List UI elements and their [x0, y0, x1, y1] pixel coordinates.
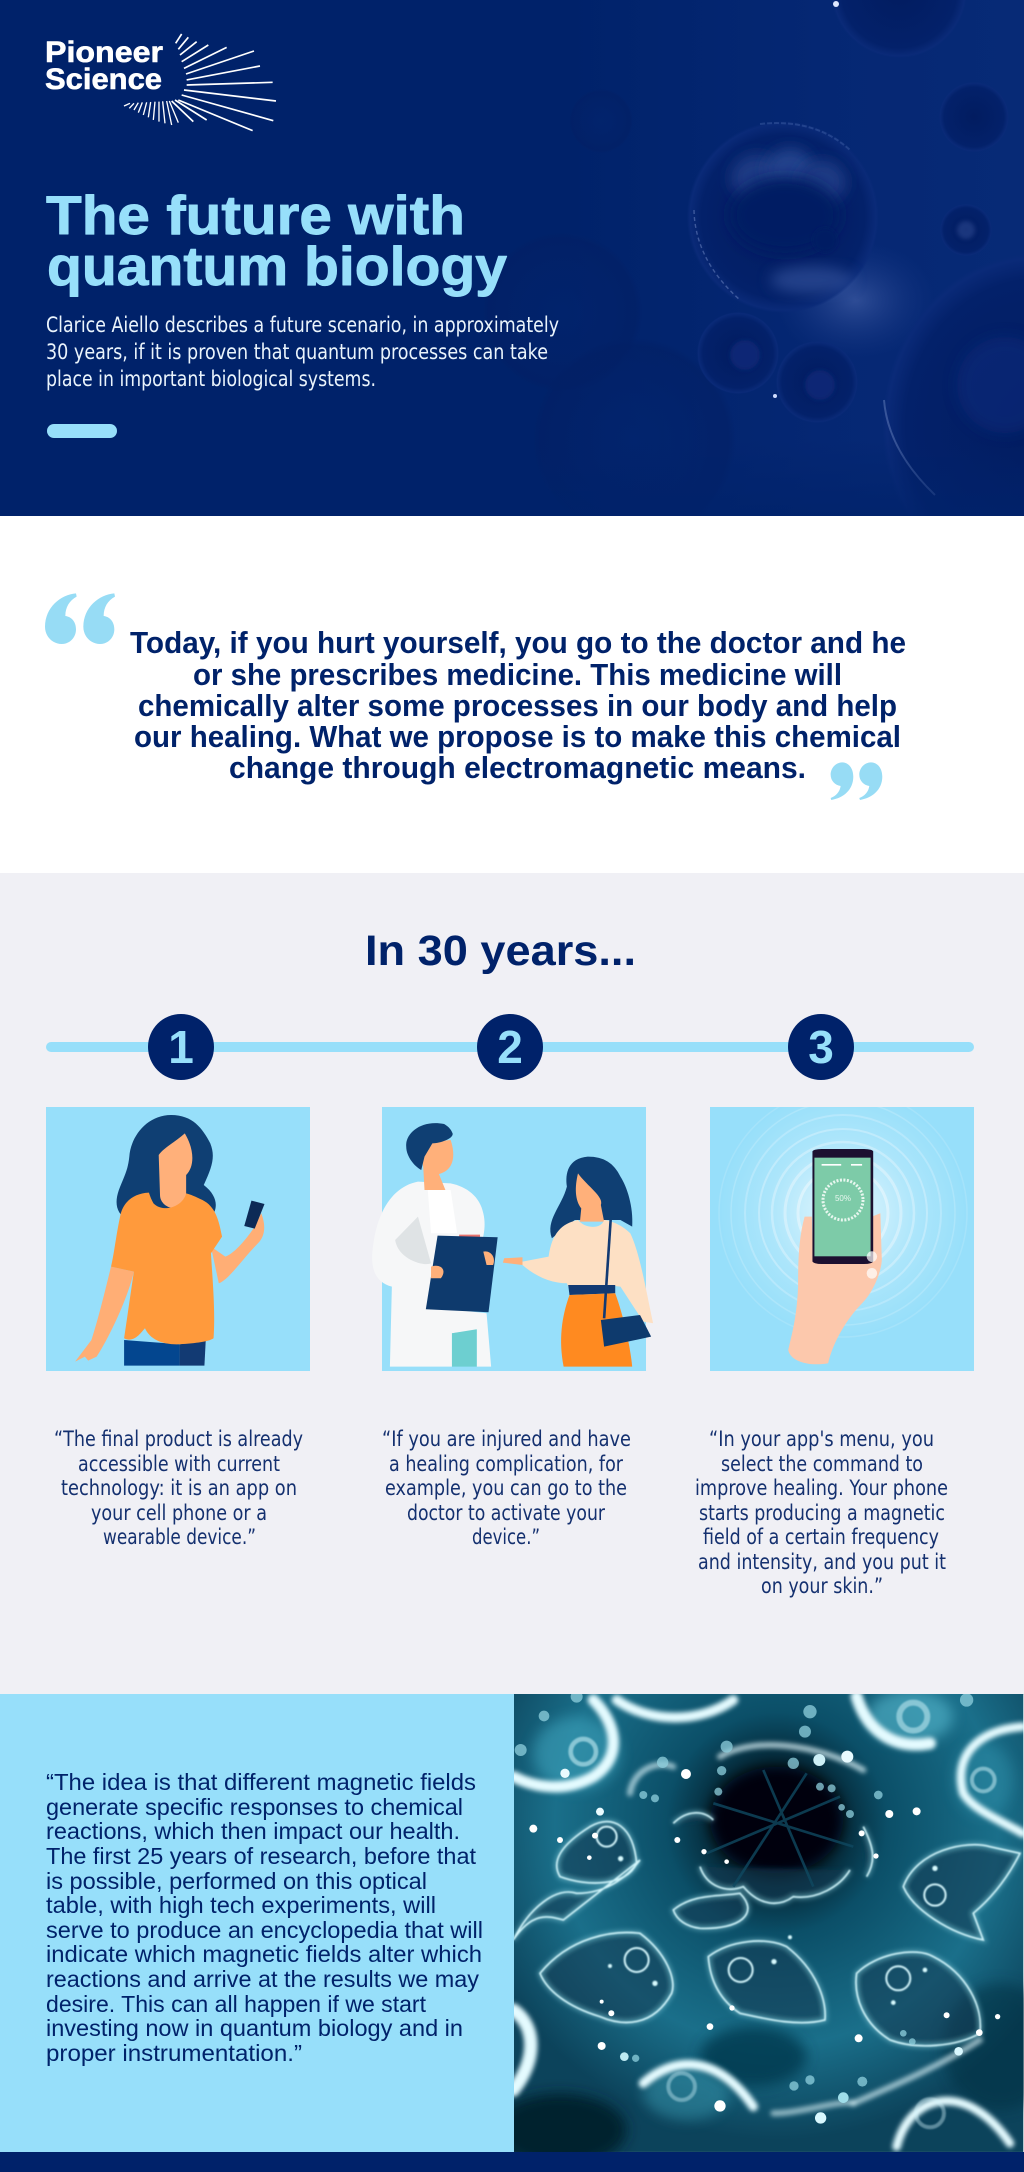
- sparkle dots: [529, 1751, 1000, 2124]
- panel: light blue closing quote: [0, 1694, 514, 2152]
- image: glowing cell structure: [493, 1690, 1024, 2167]
- quote text: chemically alter some processes in our body and help: [138, 688, 897, 723]
- step 2 marker: 2: [497, 1021, 523, 1073]
- closing quote text: generate specific responses to chemical: [46, 1794, 463, 1820]
- illustration 1: woman with phone: [46, 1107, 310, 1371]
- closing quote text: serve to produce an encyclopedia that will: [46, 1917, 483, 1943]
- title: quantum biology: [47, 235, 507, 297]
- text block: step 1: technology: it is an app on: [61, 1476, 297, 1500]
- icon: logo sunburst rays: [124, 34, 276, 131]
- quote text: [130, 625, 906, 785]
- closing quote text: proper instrumentation.”: [46, 2040, 302, 2066]
- text block: step 1: [54, 1427, 303, 1549]
- closing quote text: “The idea is that different magnetic fields: [46, 1769, 476, 1795]
- soft glow spots: [608, 1856, 938, 2005]
- closing quote text: indicate which magnetic fields alter which: [46, 1941, 482, 1967]
- logo: Pioneer Science: [45, 34, 276, 131]
- text block: step 3: and intensity, and you put it: [698, 1550, 946, 1574]
- text block: step 2: [382, 1427, 631, 1549]
- title: The future with: [46, 184, 465, 246]
- closing quote text: is possible, performed on this optical: [46, 1868, 427, 1894]
- footer bar: [0, 2152, 1024, 2172]
- intro text: 30 years, if it is proven that quantum processes can take: [46, 340, 548, 365]
- heading: In 30 years: In 30 years...: [365, 927, 636, 975]
- closing quote text: desire. This can all happen if we start: [46, 1991, 427, 2017]
- step 3 marker: [788, 1014, 854, 1080]
- phone screen progress dial: 50%: [835, 1194, 851, 1203]
- closing quote text: reactions, which then impact our health.: [46, 1818, 460, 1844]
- logo: Pioneer Science: Science: [45, 63, 162, 96]
- logo: Pioneer Science: Pioneer: [45, 36, 163, 69]
- thick blurred rings: [513, 1697, 1023, 2147]
- illustration 2: doctor and patient: [372, 1107, 653, 1371]
- dark radial fibres: [707, 1770, 853, 1887]
- text block: step 2: “If you are injured and have: [382, 1427, 631, 1451]
- text block: step 3: field of a certain frequency: [703, 1525, 939, 1549]
- quote text: change through electromagnetic means.: [229, 750, 806, 785]
- text block: step 1: your cell phone or a: [91, 1501, 267, 1525]
- illustration 3: hand holding phone with magnetic rings: [710, 1088, 974, 1371]
- text block: step 2: example, you can go to the: [385, 1476, 627, 1500]
- closing quote text: investing now in quantum biology and in: [46, 2015, 463, 2041]
- panel: gray timeline section: [0, 873, 1024, 1695]
- step 1 marker: 1: [168, 1021, 194, 1073]
- text block: step 3: select the command to: [721, 1452, 923, 1476]
- step 2 marker: [477, 1014, 543, 1080]
- accent pill: [47, 424, 117, 438]
- hero bubbles: [690, 0, 1024, 516]
- intro text: [46, 313, 559, 392]
- icon: opening quotation mark: [45, 593, 115, 644]
- phone screen progress dial: [823, 1180, 863, 1220]
- text block: step 3: “In your app's menu, you: [709, 1427, 934, 1451]
- step 3 marker: 3: [808, 1021, 834, 1073]
- panel: white quote section: [0, 516, 1024, 873]
- text block: step 1: accessible with current: [78, 1452, 280, 1476]
- intro text: Clarice Aiello describes a future scenario, in approximately: [46, 313, 559, 338]
- hero background panel: [0, 0, 1024, 516]
- step 1 marker: [148, 1014, 214, 1080]
- quote text: our healing. What we propose is to make this chemical: [134, 719, 901, 754]
- text block: step 2: doctor to activate your: [407, 1501, 605, 1525]
- nuclei: [571, 1703, 995, 2127]
- text block: step 3: starts producing a magnetic: [699, 1501, 945, 1525]
- text block: step 2: a healing complication, for: [389, 1452, 623, 1476]
- closing quote text: [46, 1769, 483, 2066]
- text block: step 3: [695, 1427, 948, 1598]
- icon: closing quotation mark: [831, 762, 882, 800]
- text block: step 2: device.”: [472, 1525, 540, 1549]
- fine petal outlines: [513, 1813, 1020, 2046]
- text block: step 1: “The final product is already: [54, 1427, 303, 1451]
- closing quote text: The first 25 years of research, before that: [46, 1843, 477, 1869]
- intro text: place in important biological systems.: [46, 367, 376, 392]
- text block: step 3: improve healing. Your phone: [695, 1476, 948, 1500]
- magnetic field rings: [718, 1088, 968, 1338]
- petal glow: [513, 1813, 1020, 2046]
- quote text: or she prescribes medicine. This medicine will: [193, 657, 842, 692]
- timeline bar with numbered steps: [46, 1014, 974, 1080]
- closing quote text: table, with high tech experiments, will: [46, 1892, 436, 1918]
- text block: step 1: wearable device.”: [103, 1525, 256, 1549]
- text block: step 3: on your skin.”: [761, 1574, 883, 1598]
- title: [46, 184, 507, 297]
- quote text: Today, if you hurt yourself, you go to the doctor and he: [130, 625, 906, 660]
- closing quote text: reactions and arrive at the results we may: [46, 1966, 479, 1992]
